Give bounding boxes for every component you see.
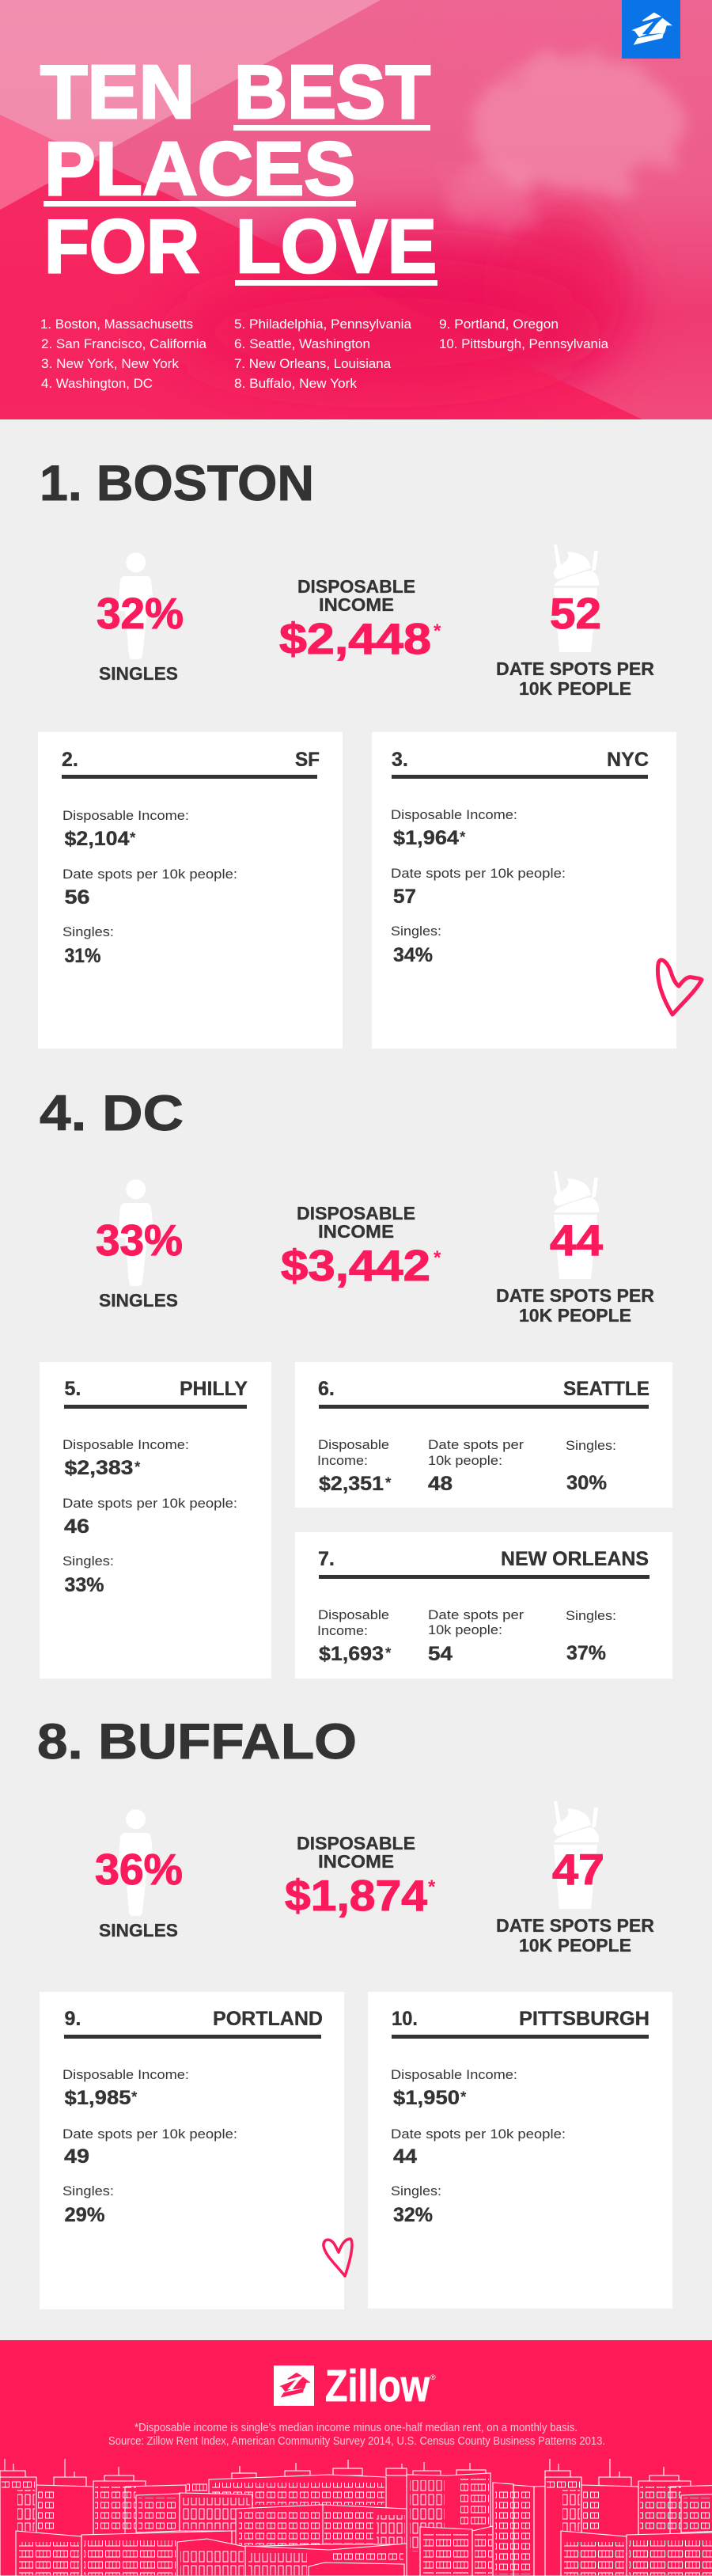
panel: San Francisco: SF [295,749,320,771]
panel: San Francisco: $2,104 [65,828,130,850]
icon: hand-drawn heart [657,960,702,1015]
stat: date spots Buffalo [496,1801,654,1956]
panel: New York City [372,732,676,1049]
panel: Seattle: SEATTLE [563,1378,650,1400]
stat: date spots Buffalo: 47 [552,1845,604,1894]
icon: blue Zillow logo [631,13,672,45]
stat: date spots Boston: 10K PEOPLE [519,678,631,699]
footnote and sources: *Disposable income is single’s median income minus one-half median rent, on a monthly basis. [134,2421,578,2434]
ranked list of ten places: 8. Buffalo, New York [234,377,358,391]
stat: singles DC [96,1179,183,1311]
ranked list of ten places: 9. Portland, Oregon [439,317,559,332]
panel: Pittsburgh: 32% [393,2204,433,2226]
stat: singles Buffalo: 36% [95,1845,183,1894]
title [40,50,437,289]
stat: disposable income DC: INCOME [318,1221,394,1242]
panel: San Francisco: Disposable Income: [62,809,189,823]
panel: San Francisco: * [130,830,136,847]
stat: disposable income DC [281,1203,441,1290]
panel: Pittsburgh: $1,950 [393,2087,460,2109]
stat: disposable income Boston: DISPOSABLE [297,576,415,597]
ranked list of ten places: 3. New York, New York [41,357,180,371]
panel: Philadelphia: 5. [65,1378,81,1400]
panel: New York City: Singles: [391,924,441,939]
stat: singles Boston: 32% [97,589,184,638]
ranked list of ten places: 6. Seattle, Washington [234,337,370,351]
stat: disposable income Boston [279,576,441,663]
stat: singles DC: SINGLES [99,1290,178,1311]
footer Zillow logo: ® [430,2373,436,2381]
stat: disposable income Buffalo: DISPOSABLE [297,1833,415,1853]
panel: Pittsburgh: 44 [393,2145,417,2168]
stat: disposable income Buffalo [285,1833,436,1920]
panel: New York City: 3. [392,749,408,771]
panel: Portland [40,1992,344,2309]
line-drawn cityscape [0,2459,712,2576]
panel: Philadelphia: $2,383 [65,1457,133,1479]
stat: singles DC: 33% [96,1216,183,1265]
panel: Philadelphia: PHILLY [180,1378,248,1400]
panel: Seattle: 6. [318,1378,335,1400]
ranked list of ten places: 2. San Francisco, California [41,337,207,351]
stat: date spots Buffalo: 10K PEOPLE [519,1935,631,1956]
heading: 1. Boston: 1. BOSTON [40,456,314,511]
stat: disposable income Boston: $2,448 [279,614,431,663]
panel: Philadelphia: * [134,1459,141,1476]
stat: date spots DC [496,1171,654,1326]
panel: New York City: 34% [393,944,433,966]
panel: Seattle: Singles: [566,1439,616,1453]
panel: New Orleans: Disposable [318,1608,389,1622]
icon: hand-drawn heart [324,2239,352,2276]
panel: New Orleans: Income: [317,1624,368,1638]
panel: New Orleans: 10k people: [428,1623,502,1637]
heading: 4. DC: 4. DC [40,1086,184,1141]
stat: singles Buffalo: SINGLES [99,1920,178,1941]
panel: Seattle: 48 [428,1473,453,1495]
panel: Philadelphia: 33% [65,1574,104,1596]
panel: Portland: 49 [64,2145,89,2168]
panel: New York City: Disposable Income: [391,808,517,822]
panel: Portland: Singles: [62,2184,114,2199]
title: PLACES [44,127,355,211]
panel: New York City: 57 [393,886,416,908]
stat: singles Buffalo [95,1809,183,1941]
panel: Portland: * [131,2089,138,2106]
ranked list of ten places: 10. Pittsburgh, Pennsylvania [439,337,609,351]
stat: disposable income DC: * [434,1247,441,1269]
panel: Pittsburgh: 10. [392,2008,418,2030]
panel: Philadelphia: Singles: [62,1554,114,1569]
panel: San Francisco: Date spots per 10k people: [62,867,237,882]
panel: Seattle [295,1362,672,1508]
stat: date spots DC: DATE SPOTS PER [496,1285,654,1306]
ranked list of ten places: 4. Washington, DC [41,377,153,391]
panel: Seattle: Income: [317,1454,368,1468]
stat: disposable income Buffalo: $1,874 [285,1871,427,1920]
stat: singles Boston: SINGLES [99,663,178,684]
ranked list of ten places [40,317,609,391]
stat: date spots Boston: 52 [550,589,601,638]
title: FOR [44,204,199,289]
stat: disposable income Boston: INCOME [319,594,394,615]
stat: disposable income DC: $3,442 [281,1241,430,1290]
panel: New Orleans [295,1532,672,1679]
panel: New Orleans: Date spots per [428,1608,525,1622]
panel: New York City: Date spots per 10k people: [391,867,566,881]
footer band [0,2340,712,2576]
panel: New York City: $1,964 [393,827,459,849]
panel: New Orleans: 37% [566,1642,606,1664]
panel: Seattle: * [385,1475,392,1492]
panel: New Orleans: * [385,1645,392,1662]
stat: date spots Boston: DATE SPOTS PER [496,658,654,679]
panel: Seattle: Date spots per [428,1438,525,1452]
panel: San Francisco [38,732,343,1049]
panel: San Francisco: Singles: [62,925,114,939]
panel: Philadelphia: Disposable Income: [62,1438,189,1452]
panel: Seattle: Disposable [318,1438,389,1452]
stat: date spots DC: 10K PEOPLE [519,1305,631,1326]
ranked list of ten places: 1. Boston, Massachusetts [40,317,193,332]
heading: 8. Buffalo: 8. BUFFALO [37,1714,357,1770]
panel: Seattle: 30% [566,1472,607,1494]
panel: Portland: 29% [65,2204,104,2226]
stat: disposable income Buffalo: * [428,1876,436,1898]
panel: San Francisco: 56 [65,886,90,909]
stat: date spots Buffalo: DATE SPOTS PER [496,1915,654,1936]
title: LOVE [236,204,437,289]
title: TEN [40,50,195,135]
panel: San Francisco: 2. [62,749,78,771]
footer Zillow logo: Zillow [325,2361,430,2411]
panel: San Francisco: 31% [65,945,101,967]
panel: Portland: Disposable Income: [62,2068,189,2082]
panel: Philadelphia: Date spots per 10k people: [62,1497,237,1511]
panel: Pittsburgh: Singles: [391,2184,441,2199]
panel: Portland: Date spots per 10k people: [62,2127,237,2142]
panel: Pittsburgh: PITTSBURGH [519,2008,650,2030]
panel: New Orleans: 54 [428,1643,453,1665]
ranked list of ten places: 7. New Orleans, Louisiana [234,357,392,371]
footnote and sources [108,2421,605,2448]
title: BEST [234,50,430,135]
footnote and sources: Source: Zillow Rent Index, American Community Survey 2014, U.S. Census County Business Patterns 2013. [108,2434,605,2448]
stat: disposable income DC: DISPOSABLE [297,1203,415,1224]
panel: Portland: PORTLAND [213,2008,323,2030]
panel: New Orleans: Singles: [566,1609,616,1623]
panel: New Orleans: $1,693 [319,1643,384,1665]
panel: New Orleans: 7. [318,1548,335,1570]
ranked list of ten places: 5. Philadelphia, Pennsylvania [234,317,412,332]
panel: Seattle: $2,351 [319,1473,384,1495]
header banner with watercolor background [0,0,712,419]
footer Zillow logo [274,2361,436,2411]
panel: Pittsburgh: * [460,2089,467,2106]
stat: disposable income Boston: * [434,620,441,642]
stat: singles Boston [97,552,184,684]
panel: Philadelphia: 46 [64,1516,89,1538]
panel: Portland: 9. [65,2008,81,2030]
panel: Pittsburgh [368,1992,672,2309]
panel: Portland: $1,985 [65,2087,131,2109]
panel: New York City: NYC [607,749,649,771]
stat: date spots DC: 44 [550,1216,603,1265]
panel: Pittsburgh: Date spots per 10k people: [391,2127,566,2142]
panel: Pittsburgh: Disposable Income: [391,2068,517,2082]
panel: Seattle: 10k people: [428,1454,502,1468]
panel: New Orleans: NEW ORLEANS [501,1548,649,1570]
panel: New York City: * [460,829,466,846]
stat: date spots Boston [496,544,654,699]
stat: disposable income Buffalo: INCOME [318,1851,394,1872]
panel: Philadelphia [40,1362,271,1679]
